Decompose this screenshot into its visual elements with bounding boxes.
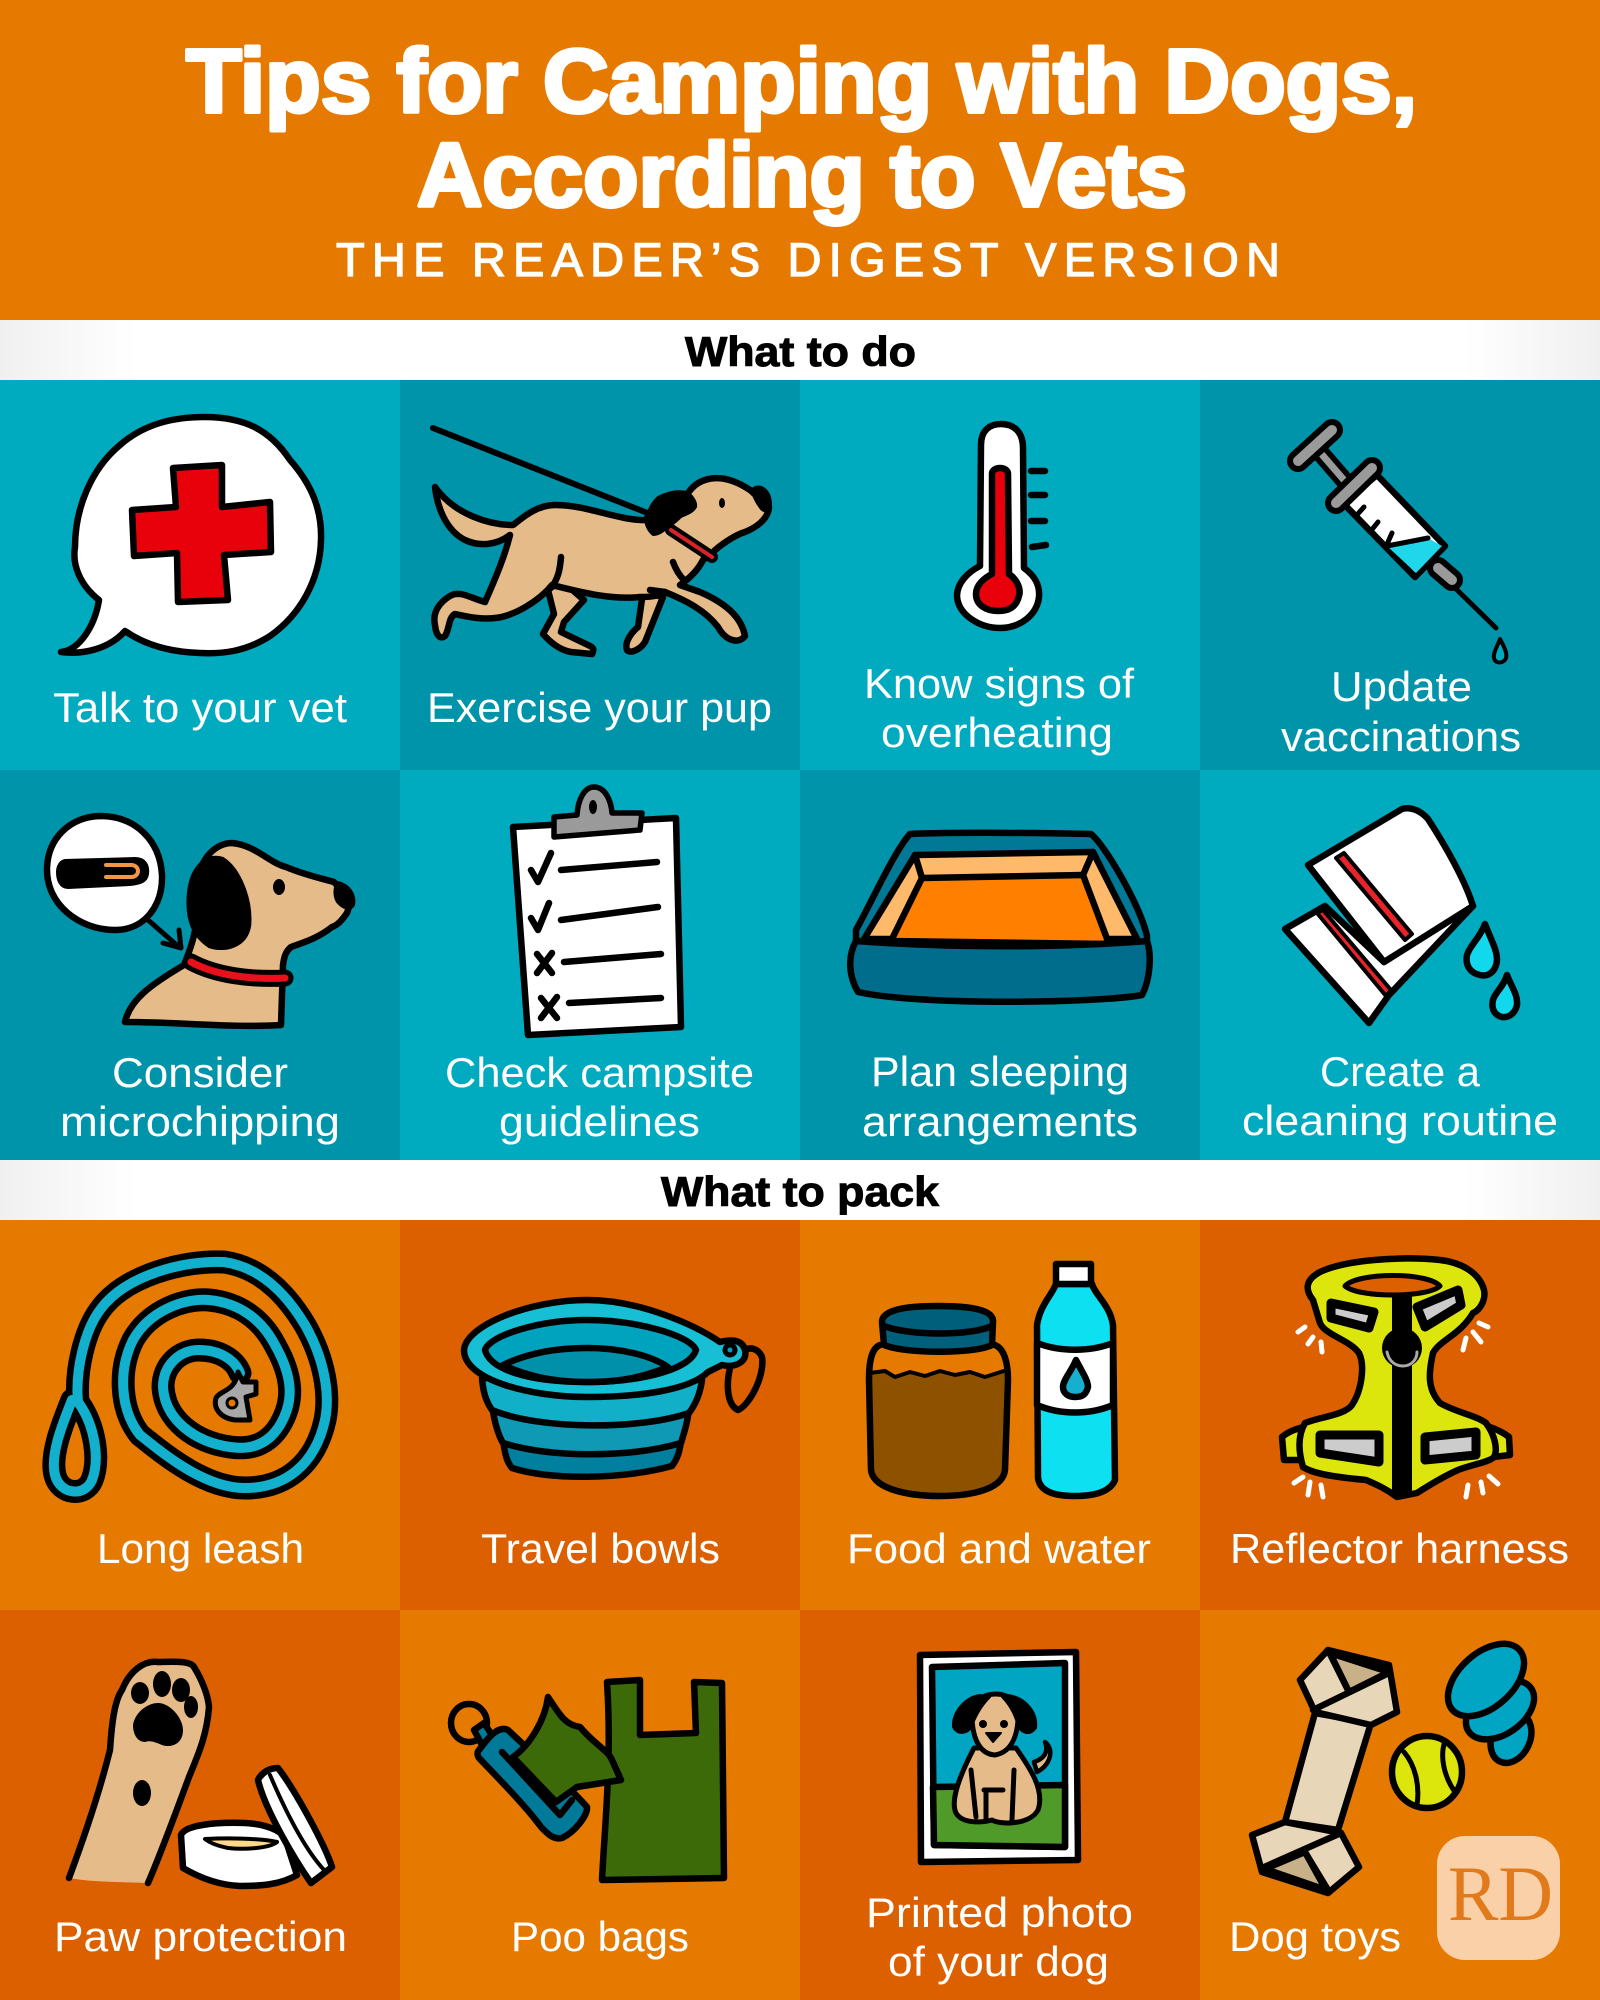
label: Know signs of [864, 660, 1134, 707]
panel: travel bowls [400, 1220, 800, 1610]
icon: speech bubble with red cross [61, 417, 321, 653]
icon: folded towel with drops [1285, 808, 1517, 1023]
icon: paw and balm tin [69, 1662, 332, 1886]
label [862, 1048, 1138, 1145]
title: Tips for Camping with Dogs, [186, 32, 1417, 132]
title: According to Vets [417, 126, 1187, 226]
label: Dog toys [1229, 1913, 1401, 1960]
label [445, 1049, 754, 1145]
label: Create a [1320, 1048, 1481, 1095]
label: Travel bowls [481, 1525, 720, 1572]
panel: plan sleeping arrangements [800, 770, 1200, 1160]
label: Paw protection [54, 1913, 347, 1960]
label: of your dog [888, 1938, 1109, 1985]
icon: dog running on leash [433, 428, 771, 654]
icon: reflective dog harness [1282, 1258, 1510, 1497]
subtitle: THE READER’S DIGEST VERSION [336, 233, 1280, 286]
icon: syringe [1298, 430, 1506, 662]
panel: paw protection [0, 1610, 400, 2000]
label: Exercise your pup [427, 684, 772, 731]
panel: check campsite guidelines [400, 770, 800, 1160]
title [186, 32, 1417, 226]
panel: dog toys [1200, 1610, 1600, 2000]
label: Reflector harness [1230, 1525, 1569, 1572]
header banner [0, 0, 1600, 320]
label: Update [1331, 663, 1472, 710]
label [1242, 1048, 1558, 1144]
label: Plan sleeping [871, 1048, 1129, 1095]
icon: bone, ball and rubber toy [1252, 1630, 1545, 1893]
icon: clipboard checklist [513, 787, 681, 1035]
panel: printed photo of your dog [800, 1610, 1200, 2000]
label: Long leash [97, 1525, 304, 1572]
label [1281, 663, 1521, 760]
panel: create a cleaning routine [1200, 770, 1600, 1160]
panel: talk to your vet [0, 380, 400, 770]
label: guidelines [499, 1098, 700, 1145]
label [864, 660, 1134, 756]
section band: what to pack: What to pack [661, 1168, 940, 1215]
label: Poo bags [511, 1913, 689, 1960]
panel: poo bags [400, 1610, 800, 2000]
label: microchipping [60, 1098, 340, 1145]
panel: long leash [0, 1220, 400, 1610]
icon: kibble jar and water bottle [869, 1264, 1115, 1496]
section band: what to do: What to do [685, 328, 916, 375]
panel: exercise your pup [400, 380, 800, 770]
panel: know signs of overheating [800, 380, 1200, 770]
icon: dog profile with microchip bubble [47, 816, 354, 1026]
icon: thermometer [957, 424, 1046, 628]
section band: what to do [0, 320, 1600, 380]
logo: RD badge [1437, 1836, 1560, 1960]
label: cleaning routine [1242, 1097, 1558, 1144]
label: arrangements [862, 1098, 1138, 1145]
label: Food and water [847, 1525, 1151, 1572]
label: Printed photo [866, 1889, 1133, 1936]
icon: framed dog photo [920, 1652, 1078, 1862]
panel: food and water [800, 1220, 1200, 1610]
label [60, 1049, 340, 1145]
icon: collapsible bowl [464, 1300, 762, 1477]
panel: update vaccinations [1200, 380, 1600, 770]
label: vaccinations [1281, 713, 1521, 760]
logo: RD badge: RD [1448, 1850, 1553, 1937]
label: Talk to your vet [53, 684, 347, 731]
icon: dog bed [850, 833, 1150, 1002]
label: Consider [112, 1049, 288, 1096]
panel: reflector harness [1200, 1220, 1600, 1610]
icon: poo bag dispenser and bag [451, 1680, 724, 1880]
icon: coiled leash [54, 1262, 327, 1491]
panel: consider microchipping [0, 770, 400, 1160]
label: Check campsite [445, 1049, 754, 1096]
label: overheating [881, 709, 1113, 756]
section band: what to pack [0, 1160, 1600, 1220]
label [866, 1889, 1133, 1985]
